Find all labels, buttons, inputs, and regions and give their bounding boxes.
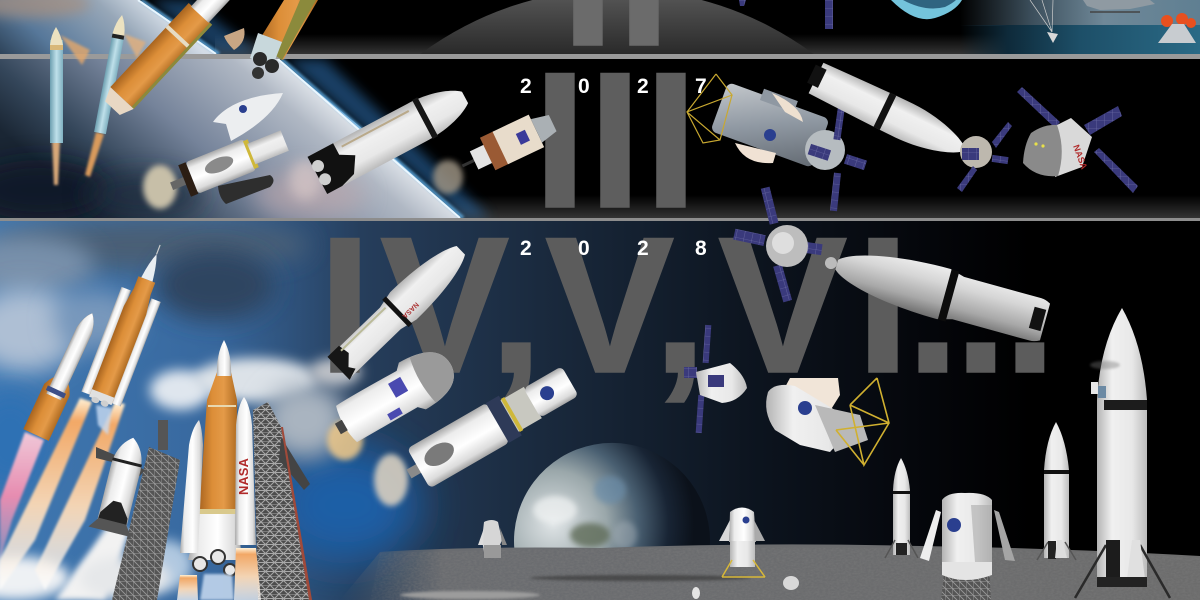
rocket: blue booster left — [50, 27, 90, 143]
rocket: white crew vehicle climbing — [88, 438, 142, 537]
numeral III: III — [533, 32, 698, 249]
heat shield panel — [218, 175, 274, 204]
rocket: SLS on launch pad: NASA — [236, 458, 251, 495]
spacecraft: small crew stage with thruster — [455, 107, 560, 182]
Earth crescent interior — [903, 0, 956, 8]
Earth and atmosphere — [0, 59, 490, 220]
spacecraft: Orion capsule with solar arrays: NASA — [1071, 143, 1089, 171]
landed rocket, medium — [1037, 422, 1076, 560]
spacecraft: small Orion near Earth — [684, 325, 747, 433]
big numerals IV,V,VI...: IV,V,VI... — [318, 197, 1057, 414]
divider: lower — [0, 218, 1200, 221]
spacecraft: crew module with thruster — [335, 352, 454, 442]
flag and hatch glow — [1090, 361, 1120, 369]
plume: second booster fairing flame — [124, 34, 146, 58]
spacecraft: Orion with four solar arrays — [733, 225, 823, 302]
rocket: white crewed booster rising — [23, 313, 94, 441]
engine glow plumes — [327, 420, 408, 506]
separated fairing piece — [224, 28, 245, 50]
panel: lower band, 2028 and beyond — [0, 197, 1200, 600]
solar array crossing the divider — [761, 187, 778, 225]
lunar surface — [340, 544, 1200, 600]
year label: 2027: 2027 — [520, 75, 707, 98]
rocket: reusable vehicle over Earth limb — [306, 78, 475, 195]
Earth limb, upper left — [0, 0, 260, 54]
rocket: SLS on launch pad — [180, 340, 256, 576]
panel: top band, return to Earth — [0, 0, 1200, 54]
Orion capsule with airbags — [1158, 13, 1196, 43]
Earth — [514, 443, 710, 548]
rocket: SLS in flight — [82, 244, 161, 407]
rocket: spent core with engines — [250, 0, 318, 79]
launch tower, right — [253, 402, 312, 600]
exhaust: pink and orange flames — [0, 398, 125, 590]
fairing half with NASA logo — [213, 93, 283, 141]
landed rocket, large — [1075, 308, 1170, 598]
rocket: core stage, top left — [101, 0, 251, 119]
floor shade — [215, 38, 1000, 54]
launch smoke — [0, 525, 170, 600]
launch tower, left — [96, 420, 180, 600]
lunar lander, small — [719, 508, 765, 577]
rocket: white starship upper left — [328, 246, 465, 380]
helicopter — [1083, 0, 1155, 12]
solar panels, top band — [739, 0, 833, 29]
floor shade — [449, 199, 1200, 218]
parachutes and capsule — [1030, 0, 1058, 43]
small distant lander — [478, 520, 507, 558]
rocket: white starship upper left: NASA — [400, 300, 420, 319]
rocket: large grey upper stage — [825, 256, 1050, 342]
lander docked with service module — [687, 74, 867, 211]
clouds — [0, 219, 420, 590]
divider: upper — [0, 54, 1200, 59]
rocket: second booster — [94, 14, 128, 134]
sky and space gradient — [0, 221, 951, 600]
small engine glows — [143, 160, 463, 209]
rocket: white tanker with service module — [802, 58, 1012, 192]
upper stage with docking section — [165, 125, 291, 202]
ocean recovery scene backdrop — [960, 0, 1200, 54]
Earth crescent — [891, 0, 962, 19]
panel: middle band, 2027 mission — [0, 32, 1200, 249]
Moon dome — [428, 0, 806, 49]
spacecraft: transfer stage — [406, 368, 577, 487]
year label: 2028: 2028 — [520, 237, 707, 260]
lunar lander, large with NASA logo — [920, 493, 1015, 600]
exhaust: launch pad flames — [177, 548, 261, 600]
spacecraft: Orion capsule with solar arrays — [1017, 87, 1138, 193]
rocket: thin blue booster flames — [52, 132, 104, 185]
spacecraft: lander with gold truss — [766, 378, 889, 465]
landed rocket, small — [885, 458, 918, 558]
